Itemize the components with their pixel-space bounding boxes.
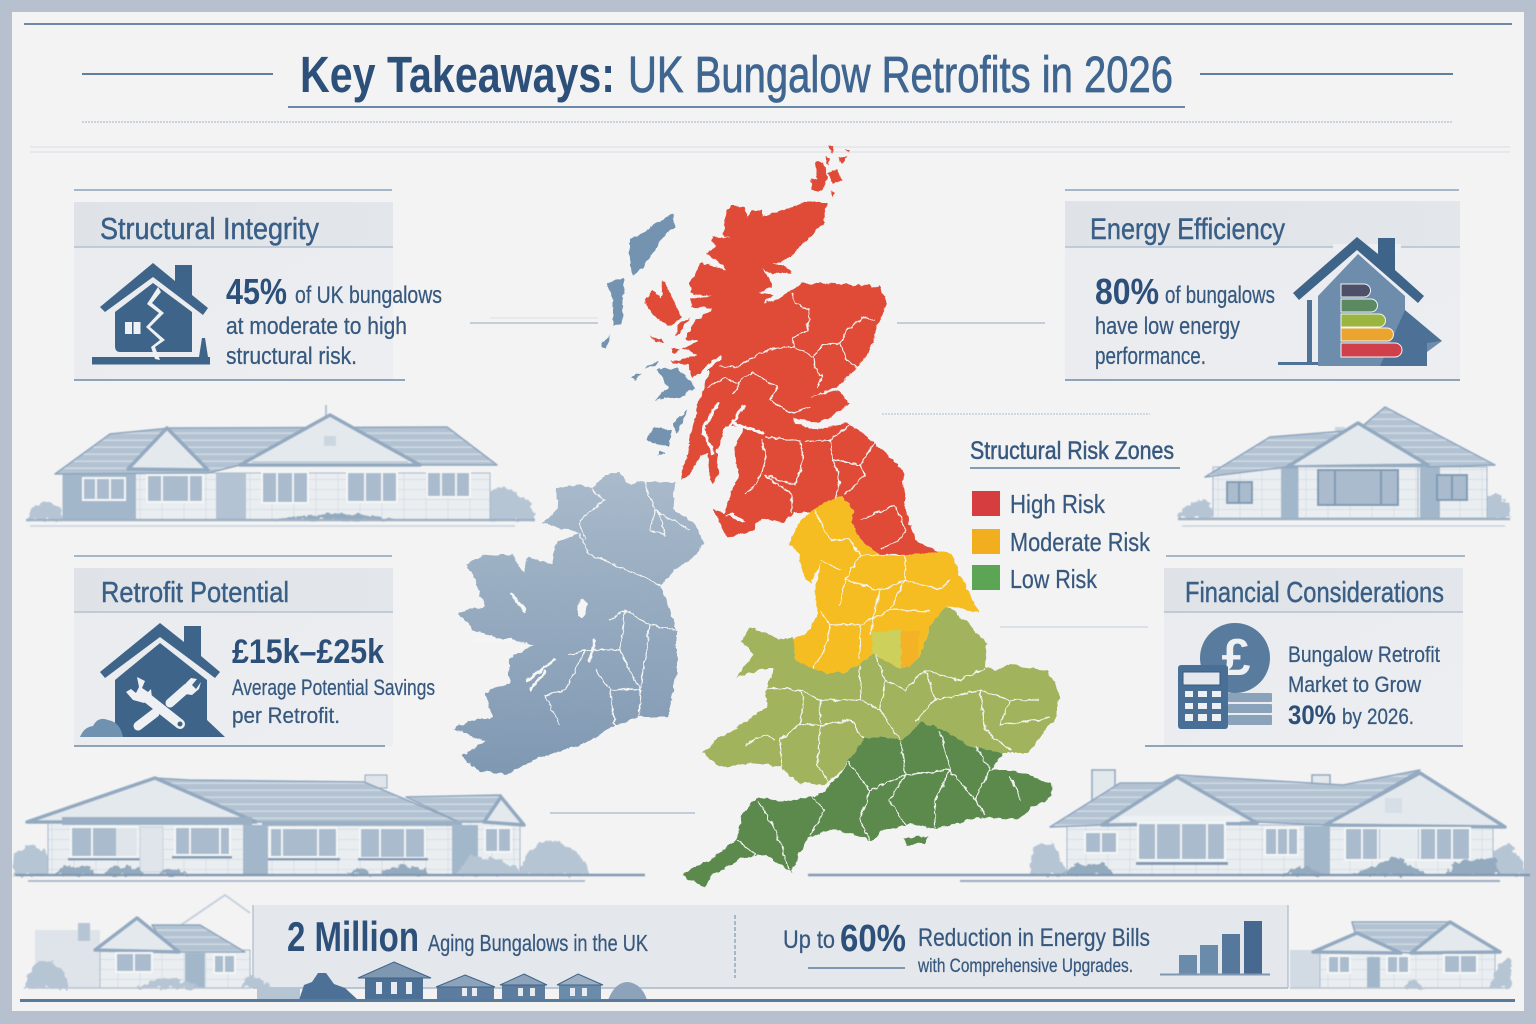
icon: pound coin, calculator and coin stacks [1178, 623, 1272, 729]
heading: financial considerations: Financial Considerations [1185, 577, 1444, 609]
map: Wales, Midlands and East moderate-low risk [703, 606, 1060, 785]
legend item: high risk: High Risk [1010, 489, 1106, 519]
heading: retrofit potential: Retrofit Potential [101, 577, 289, 609]
map: northern England moderate risk [789, 496, 979, 673]
text: 60% reduction in energy bills: 60% [840, 918, 906, 960]
illustration: bungalow upper right [1178, 407, 1510, 526]
illustration: bungalow lower right [808, 770, 1530, 881]
legend: structural risk zones [970, 437, 1180, 594]
text: 2 million aging bungalows: Aging Bungalows in the UK [428, 930, 649, 956]
panel: financial considerations [1145, 556, 1465, 746]
chart: rising bars [1160, 921, 1270, 974]
legend item: high risk [972, 489, 1106, 519]
text: 80% statistic: performance. [1095, 343, 1206, 370]
icon: house with energy rating bars [1278, 237, 1442, 366]
legend item: low risk [972, 564, 1098, 594]
text: market growth statistic: Market to Grow [1288, 672, 1421, 697]
text: market growth statistic: by 2026. [1342, 704, 1414, 729]
legend item: moderate risk: Moderate Risk [1010, 527, 1151, 557]
illustration: row of small houses [257, 962, 647, 1000]
text: market growth statistic [1288, 642, 1440, 730]
illustration: bungalow lower left [13, 775, 645, 881]
text: 60% reduction in energy bills: Up to [783, 926, 835, 954]
text: 45% statistic [226, 271, 442, 370]
text: 45% statistic: at moderate to high [226, 313, 407, 340]
icon: cracked house [92, 263, 210, 364]
text: market growth statistic: 30% [1288, 700, 1336, 730]
legend item: low risk: Low Risk [1010, 564, 1098, 594]
bottom rule [20, 999, 1515, 1002]
panel: structural integrity [74, 190, 442, 380]
panel: retrofit potential [74, 556, 435, 746]
icon: house with crossed tools [80, 623, 225, 737]
legend: structural risk zones: Structural Risk Zones [970, 437, 1174, 465]
title: Key Takeaways: [300, 46, 615, 103]
text: 2 million aging bungalows: 2 Million [287, 913, 419, 960]
legend item: moderate risk [972, 527, 1151, 557]
text: 60% reduction in energy bills: Reduction in Energy Bills [918, 924, 1150, 952]
illustration: bungalow upper left [26, 405, 535, 526]
map: Scotland and north-east high risk [645, 145, 939, 555]
text: savings statistic: £15k–£25k [232, 633, 384, 671]
text: savings statistic: per Retrofit. [232, 703, 340, 728]
text: 60% reduction in energy bills: with Comprehensive Upgrades. [917, 956, 1133, 977]
text: savings statistic: Average Potential Savings [232, 675, 435, 700]
text: 80% statistic: 80% [1095, 271, 1159, 312]
bottom banner [253, 905, 1288, 1000]
text: 60% reduction in energy bills [783, 918, 1150, 977]
text: 45% statistic: of UK bungalows [295, 282, 442, 309]
text: 80% statistic: have low energy [1095, 313, 1240, 340]
illustration: bottom-left bungalow [25, 895, 270, 988]
text: 45% statistic: 45% [226, 271, 287, 312]
heading: structural integrity: Structural Integrity [100, 211, 319, 246]
text: 2 million aging bungalows [287, 913, 649, 960]
text: 45% statistic: structural risk. [226, 343, 357, 370]
map: southern England low risk [681, 722, 1052, 887]
illustration: bottom-right bungalow [1290, 922, 1511, 988]
title: UK Bungalow Retrofits in 2026 [628, 46, 1173, 103]
map of UK and Ireland [452, 145, 1060, 887]
panel: energy efficiency [1065, 190, 1460, 380]
map: Hebrides islands [601, 213, 695, 456]
text: 80% statistic: of bungalows [1165, 282, 1275, 309]
title [82, 46, 1453, 107]
text: market growth statistic: Bungalow Retrofit [1288, 642, 1440, 667]
icon: pound coin, calculator and coin stacks: £ [1222, 629, 1251, 687]
heading: energy efficiency: Energy Efficiency [1090, 213, 1285, 246]
map: Ireland [452, 472, 705, 775]
text: savings statistic [232, 633, 435, 728]
text: 80% statistic [1095, 271, 1275, 370]
